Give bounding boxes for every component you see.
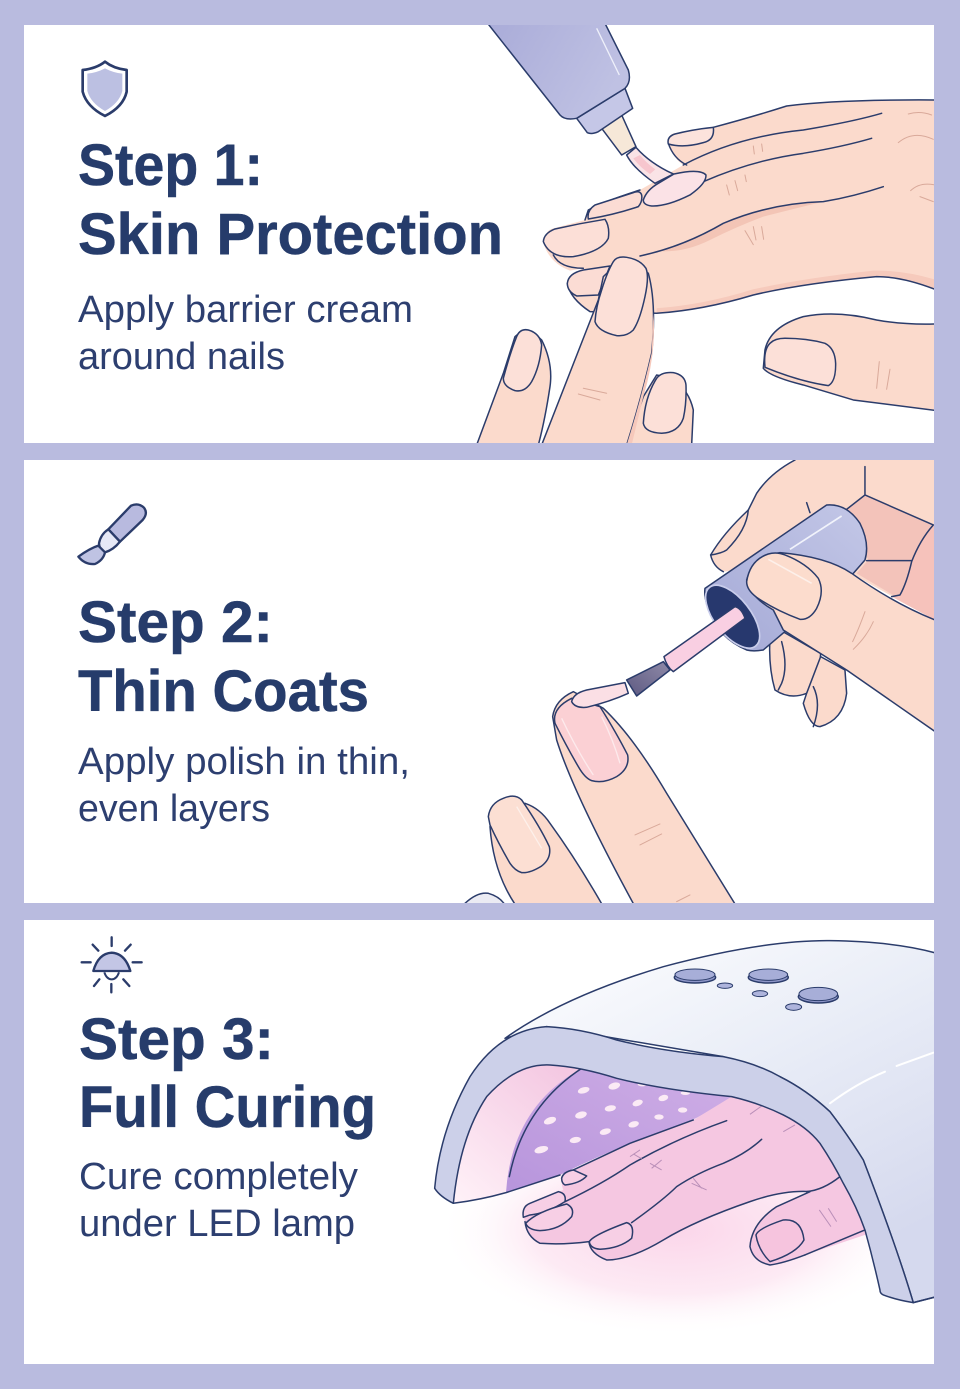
- panel: step 1 skin protection: [24, 20, 937, 445]
- second finger: [463, 796, 603, 907]
- heading: step 1: [78, 133, 503, 267]
- heading: step 3: [79, 1007, 376, 1140]
- lamp interior: [453, 1065, 732, 1203]
- hand under lamp: [523, 1097, 870, 1265]
- lower right thumb: [763, 314, 937, 411]
- icon: brush: [78, 504, 146, 564]
- text: step 3 description: Cure completely: [79, 1156, 358, 1198]
- polish bottle cap: [695, 505, 867, 657]
- heading: step 3: Step 3:: [79, 1007, 274, 1072]
- icon: lamp: [82, 937, 142, 992]
- text: step 3 description: under LED lamp: [79, 1203, 355, 1245]
- panel: step 3 full curing: [24, 920, 937, 1364]
- icon: shield: [83, 62, 127, 116]
- illustration: cream applied around nails: [477, 20, 937, 445]
- text: step 2 description: even layers: [78, 788, 270, 830]
- heading: step 1: Skin Protection: [78, 202, 503, 267]
- cream blob: [627, 147, 706, 206]
- cream tube: [485, 20, 636, 155]
- lower fingers: [477, 257, 693, 445]
- text: step 1 description: [78, 289, 413, 378]
- thumb holding brush: [747, 553, 937, 733]
- panel: step 2 thin coats: [24, 460, 937, 907]
- lamp front rim: [435, 1027, 937, 1303]
- illustration: LED lamp with hand: [435, 941, 937, 1337]
- heading: step 3: Full Curing: [79, 1075, 376, 1140]
- text: step 3 description: [79, 1156, 358, 1245]
- holding hand: [711, 460, 935, 727]
- pink glow: [496, 1162, 856, 1310]
- heading: step 1: Step 1:: [78, 133, 263, 198]
- main finger with nail: [553, 683, 737, 907]
- text: step 2 description: Apply polish in thin,: [78, 741, 410, 783]
- heading: step 2: Thin Coats: [78, 659, 369, 724]
- text: step 2 description: [78, 741, 410, 830]
- heading: step 2: Step 2:: [78, 590, 273, 655]
- lamp buttons: [674, 969, 838, 1010]
- main hand: [543, 100, 937, 314]
- text: step 1 description: Apply barrier cream: [78, 289, 413, 331]
- text: step 1 description: around nails: [78, 336, 285, 378]
- illustration: applying polish: [463, 460, 937, 907]
- brush: [627, 607, 745, 696]
- heading: step 2: [78, 590, 369, 724]
- lamp body: [505, 941, 937, 1303]
